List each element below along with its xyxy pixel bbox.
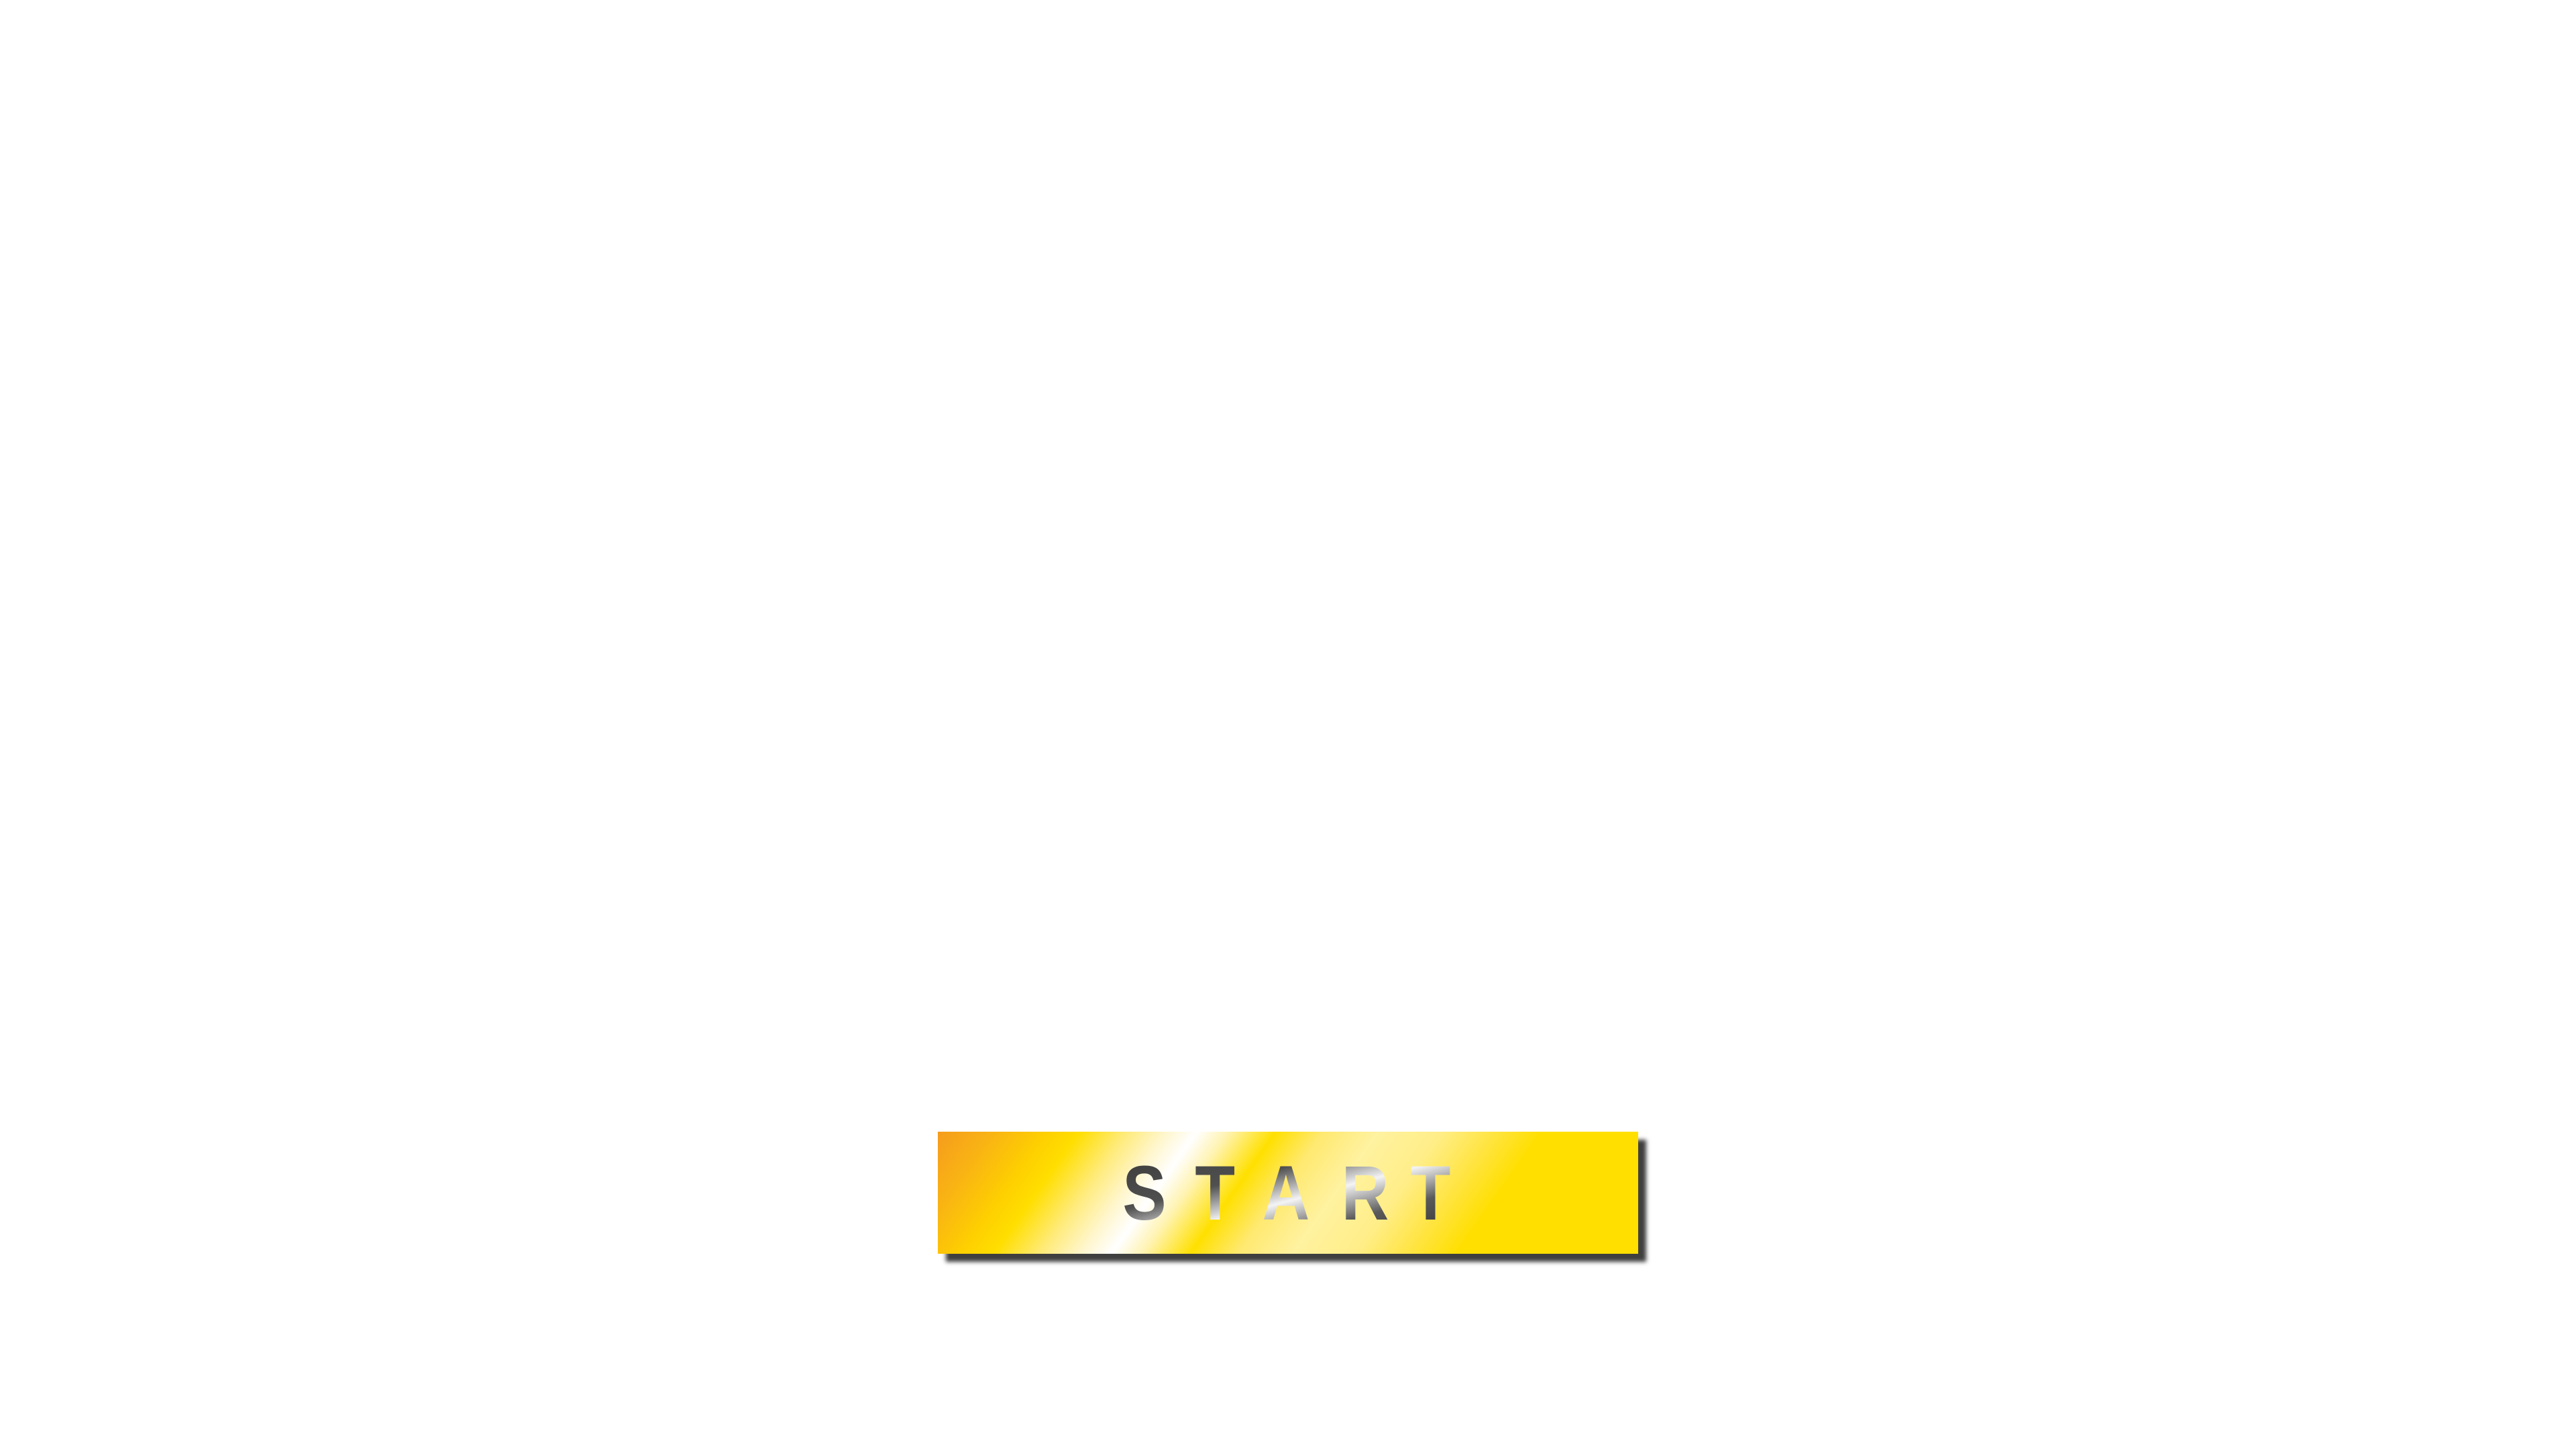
start button xyxy=(938,1132,1638,1254)
button label: START: T xyxy=(1195,1149,1235,1236)
button label: START: R xyxy=(1342,1149,1389,1236)
button label: START: S xyxy=(1122,1149,1167,1236)
button label: START: T xyxy=(1411,1149,1450,1236)
button label: START xyxy=(1122,1149,1450,1236)
button label: START: A xyxy=(1263,1149,1309,1236)
